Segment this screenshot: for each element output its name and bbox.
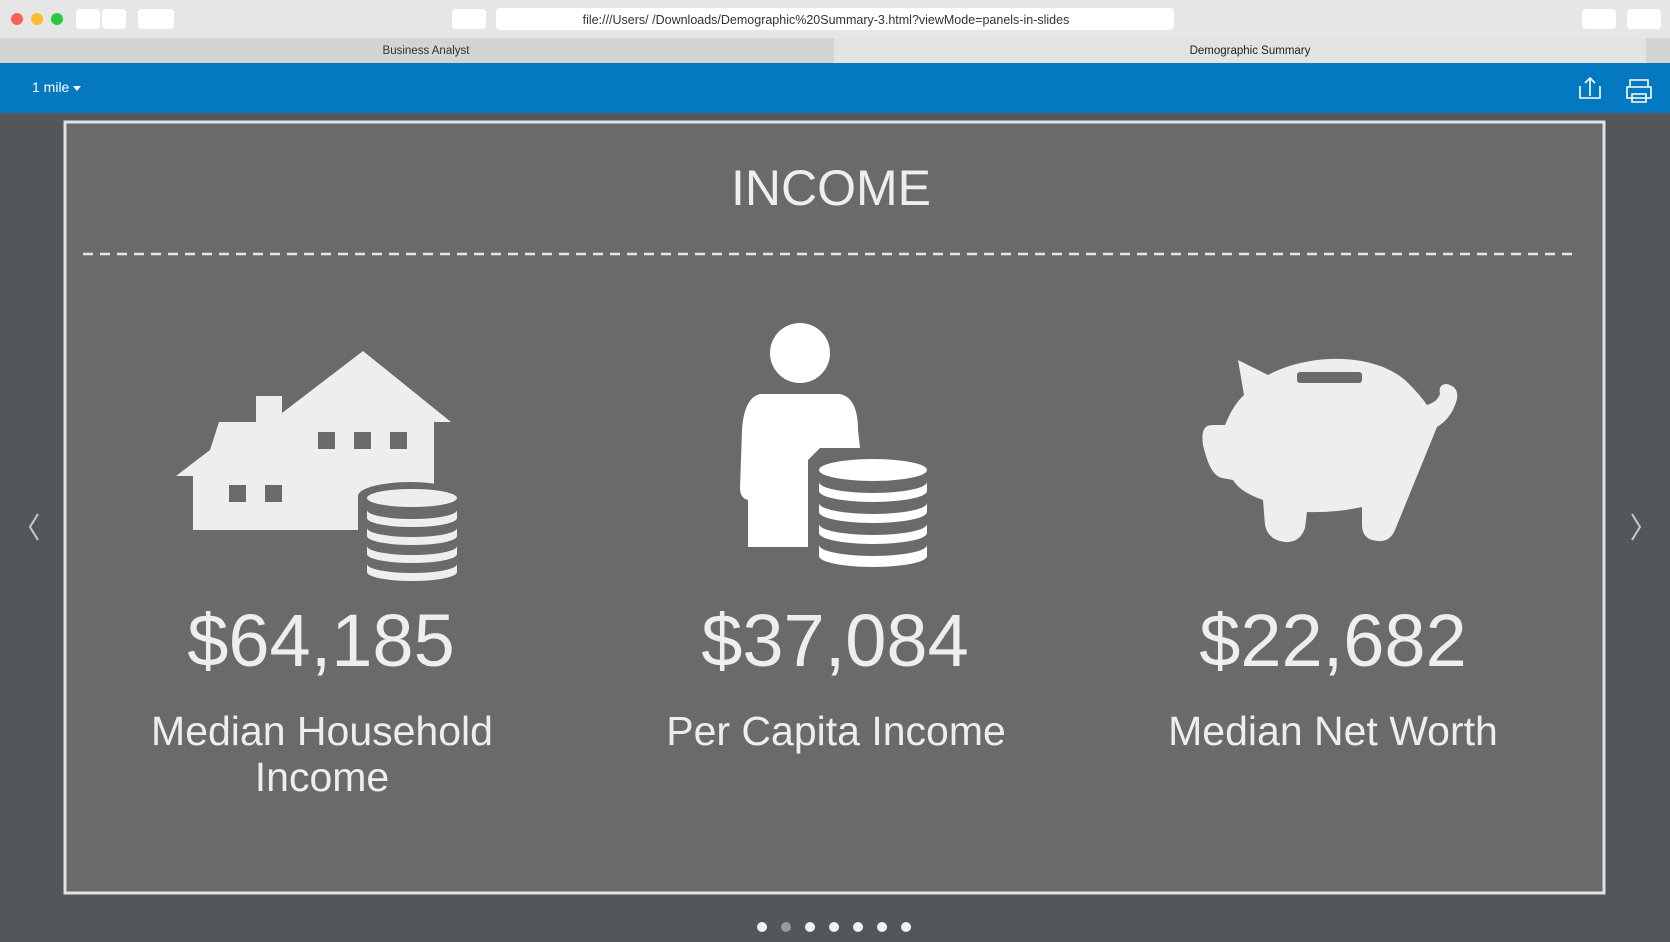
- stat: median household income: Income: [255, 754, 389, 800]
- stat: median net worth: Median Net Worth: [1168, 708, 1498, 754]
- stat: median net worth: [1168, 599, 1498, 754]
- stat: median household income: [151, 599, 493, 800]
- icon: piggy bank: [1202, 359, 1457, 542]
- toolbar: file:///Users/ /Downloads/Demographic%20Summary-3.html?viewMode=panels-in-slides: [583, 13, 1069, 27]
- stat: per capita income: Per Capita Income: [666, 708, 1006, 754]
- panel: income: [65, 122, 1604, 893]
- blue header bar: 1 mile: [32, 79, 70, 95]
- stat: per capita income: [666, 599, 1006, 754]
- toolbar: [0, 0, 1670, 38]
- tab bar: [0, 38, 1670, 63]
- tab bar: Business Analyst: [383, 45, 470, 57]
- title: INCOME: [731, 160, 931, 216]
- blue header bar: [0, 63, 1670, 113]
- stat: median household income: $64,185: [187, 599, 455, 682]
- icon: house with coins: [176, 351, 462, 582]
- tab bar: Demographic Summary: [1190, 45, 1311, 57]
- stat: per capita income: $37,084: [701, 599, 969, 682]
- stat: median household income: Median Household: [151, 708, 493, 754]
- stat: median net worth: $22,682: [1199, 599, 1467, 682]
- icon: person with coins: [740, 323, 927, 567]
- arrows: [30, 514, 1640, 540]
- pagination dots: [757, 922, 911, 932]
